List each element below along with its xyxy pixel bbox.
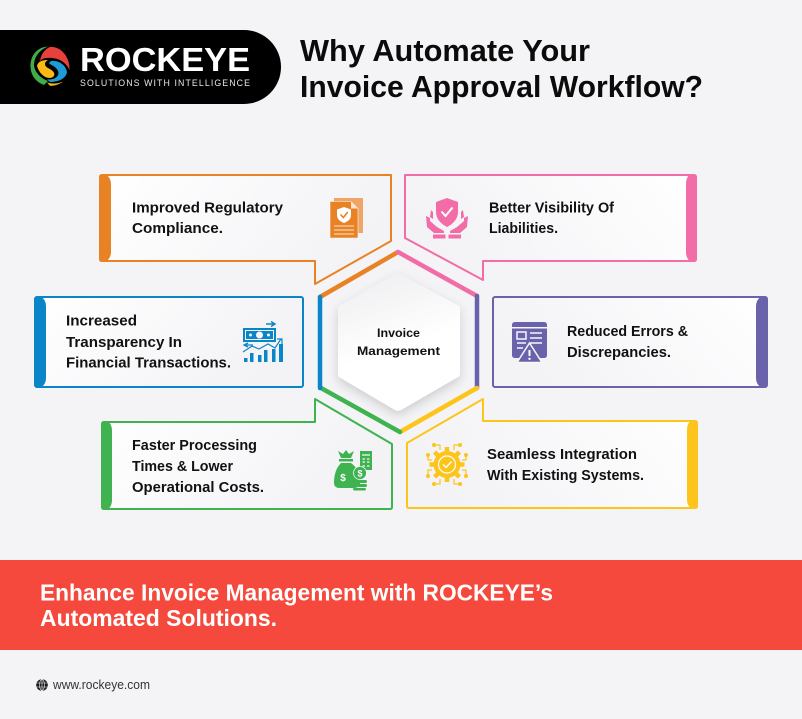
- text: improved regulatory compliance: [132, 200, 283, 237]
- text: faster processing: Times & Lower: [132, 459, 233, 475]
- text: faster processing: Operational Costs.: [132, 480, 264, 496]
- icon: gear with circuits: [426, 443, 468, 486]
- icon: money bag with calculator: [334, 450, 372, 490]
- title: Invoice Approval Workflow?: [300, 69, 703, 104]
- text: reduced errors: Reduced Errors &: [567, 324, 689, 340]
- text: reduced errors: Discrepancies.: [567, 345, 671, 361]
- logo tagline: SOLUTIONS WITH INTELLIGENCE: [80, 78, 250, 88]
- title: [300, 33, 703, 104]
- logo swirl icon: [30, 46, 70, 86]
- panel: increased transparency: [34, 296, 303, 388]
- icon: money bag with calculator: $: [357, 468, 363, 478]
- title: Why Automate Your: [300, 33, 590, 68]
- icon: shield document: [330, 198, 363, 238]
- text: reduced errors: [567, 324, 689, 361]
- panel: faster processing: [102, 399, 392, 510]
- text: better visibility of liabilities: Better Visibility Of: [489, 200, 614, 216]
- call-to-action band: Enhance Invoice Management with ROCKEYE’s: [40, 580, 553, 606]
- center hexagon: invoice management: [338, 273, 460, 411]
- logo banner: [0, 30, 281, 104]
- text: increased transparency: Financial Transactions.: [66, 356, 231, 372]
- panel: reduced errors: [493, 296, 768, 388]
- text: improved regulatory compliance: Improved Regulatory: [132, 200, 283, 216]
- text: seamless integration: [487, 447, 644, 484]
- footer website: www.rockeye.com: [52, 678, 150, 692]
- icon: hands holding shield: [426, 198, 468, 238]
- icon: warning document: [512, 322, 547, 362]
- center hexagon: invoice management: Invoice: [377, 328, 420, 340]
- panel: improved regulatory compliance: [100, 174, 391, 284]
- call-to-action band: [0, 560, 802, 650]
- text: seamless integration: With Existing Systems.: [487, 468, 644, 484]
- call-to-action band: Automated Solutions.: [40, 605, 277, 631]
- icon: money and growth chart: [243, 322, 283, 362]
- text: better visibility of liabilities: Liabilities.: [489, 221, 558, 237]
- text: better visibility of liabilities: [489, 200, 614, 237]
- logo wordmark: ROCKEYE: [80, 42, 250, 79]
- text: faster processing: Faster Processing: [132, 438, 257, 454]
- panel: seamless integration: [407, 399, 698, 508]
- text: improved regulatory compliance: Compliance.: [132, 221, 223, 237]
- text: seamless integration: Seamless Integration: [487, 447, 637, 463]
- icon: money bag with calculator: $: [340, 473, 346, 484]
- text: increased transparency: Transparency In: [66, 335, 182, 351]
- text: increased transparency: Increased: [66, 314, 137, 330]
- central hexagon ring: [320, 252, 477, 432]
- text: faster processing: [132, 438, 264, 496]
- icon: globe: [36, 679, 48, 691]
- text: increased transparency: [66, 314, 231, 372]
- center hexagon: invoice management: Management: [357, 346, 440, 358]
- panel: better visibility of liabilities: [405, 174, 696, 280]
